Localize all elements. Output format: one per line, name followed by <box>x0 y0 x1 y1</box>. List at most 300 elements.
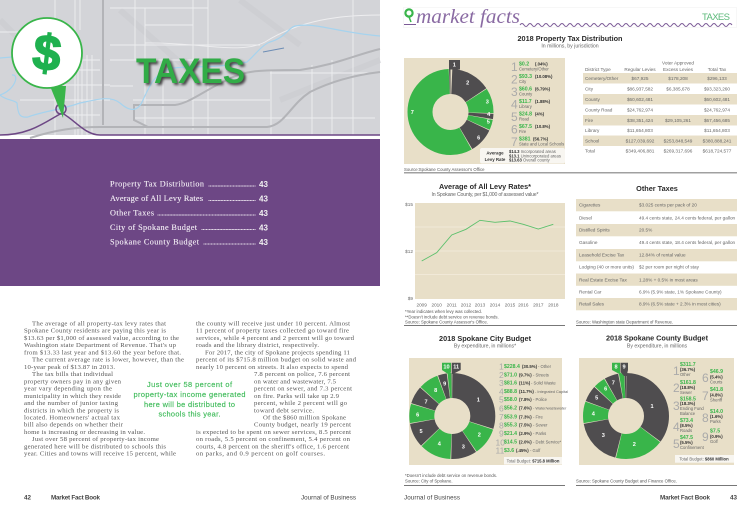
article text column 2: County budget, nearly 19 percent <box>254 422 351 429</box>
panel: city budget donut chart: 3 <box>462 445 465 451</box>
line chart: average levy rates: 2010 <box>431 302 442 308</box>
legend: county budget donut: Roads <box>680 428 692 433</box>
legend: county budget donut: Ending Fund <box>680 406 704 411</box>
article text column 2: roads and the library district, respectively. <box>196 342 319 349</box>
table of contents: Spokane County Budget <box>110 238 200 246</box>
legend: county budget donut: Golf <box>710 439 719 444</box>
table: district type levies: $38,351,424 <box>627 118 653 123</box>
table: district type levies: District Type <box>585 67 611 72</box>
table: district type levies: Total Tax <box>708 67 727 72</box>
legend: county budget donut: 8 <box>702 411 709 425</box>
legend: county budget donut: Sewer <box>680 390 692 395</box>
table of contents: .................................... <box>201 223 256 232</box>
purple route lines <box>0 104 380 135</box>
table of contents: 43 <box>259 194 268 204</box>
legend: city budget donut: 2 <box>499 370 504 380</box>
panel: property tax donut chart <box>404 58 565 164</box>
article text column 2 <box>196 320 357 458</box>
heading: city budget: By expenditure, in millions* <box>454 344 516 350</box>
article text column 2: Of the $860 million Spokane <box>263 414 346 422</box>
panel: purple contents band <box>0 139 380 286</box>
table: other taxes: Retail Sales <box>579 302 605 307</box>
callout: average levy rate: Average <box>486 150 504 156</box>
legend: county budget donut: Sheriff <box>710 398 723 402</box>
panel: city budget donut chart: 1 <box>477 397 480 403</box>
panel: county budget donut chart: 8 <box>614 365 618 371</box>
line chart: average levy rates: 2013 <box>475 302 486 308</box>
panel: property tax donut chart: 1 <box>453 62 456 68</box>
article text column 2: percent of its $715.8 million budget on solid waste and <box>196 357 357 364</box>
legend: county budget donut: (36.7%) <box>680 367 696 372</box>
footer right page: 43 <box>730 494 738 502</box>
panel: city budget donut chart: 5 <box>419 429 423 435</box>
legend: county budget donut: $41.8 <box>710 387 723 393</box>
table: district type levies: $93,323,260 <box>704 87 730 92</box>
panel: property tax donut chart: 4 <box>487 112 491 118</box>
legend: county budget donut: (8.5%) <box>680 423 693 428</box>
legend: city budget donut: 7 <box>499 412 504 422</box>
line chart: average levy rates: 2009 <box>416 302 427 308</box>
article text column 1: Spokane County residents are paying this year is <box>24 328 166 335</box>
legend: property tax donut: 7 <box>511 135 518 149</box>
legend: property tax donut: $381 <box>519 136 531 142</box>
legend: city budget donut: - Parks <box>533 431 546 436</box>
article text column 1: Just over 58 percent of property-tax income <box>32 436 159 443</box>
legend: county budget donut: 7 <box>702 389 709 403</box>
legend: property tax donut <box>511 60 564 149</box>
table: district type levies: $127,039,692 <box>626 138 655 143</box>
table: other taxes: 8.9% (6.5% state + 2.3% in most cities) <box>639 302 721 307</box>
table: district type levies: $269,317,696 <box>664 149 693 154</box>
article text column 1: municipality in which they reside <box>24 393 121 400</box>
legend: property tax donut: Fire <box>519 129 527 134</box>
line chart: average levy rates: 2018 <box>548 302 559 308</box>
legend: county budget donut: Confinement <box>680 445 705 450</box>
heading: county budget: 2018 Spokane County Budget <box>606 334 709 342</box>
legend: city budget donut: $21.4 <box>504 431 517 437</box>
legend: property tax donut: (6.79%) <box>535 86 551 92</box>
legend: property tax donut: $0.2 <box>519 62 529 68</box>
source: city budget <box>404 473 565 486</box>
header: market facts logo <box>404 6 736 28</box>
chart footnotes: Source: Spokane County Assessor's Office. <box>405 320 488 324</box>
footer left page: Journal of Business <box>301 494 356 502</box>
legend: property tax donut: 4 <box>511 98 518 112</box>
legend: property tax donut: $93.3 <box>519 74 532 80</box>
table of contents <box>110 180 268 247</box>
heading: property tax distribution: In millions, by jurisdiction <box>541 44 599 50</box>
legend: city budget donut: 11 <box>496 446 505 456</box>
legend: city budget donut: (7.8%) <box>519 397 532 402</box>
legend: city budget donut: 5 <box>499 395 504 405</box>
source: city budget: Source: City of Spokane. <box>405 478 453 484</box>
panel: county budget donut chart: 9 <box>622 365 626 371</box>
legend: county budget donut: $311.7 <box>680 362 696 368</box>
source: county budget: Source: Spokane County Budget and Finance Office. <box>576 478 677 484</box>
panel: city budget donut chart: 6 <box>416 413 419 419</box>
table: other taxes: $3.025 cents per pack of 20 <box>639 203 697 208</box>
line chart: average levy rates: 2015 <box>505 302 516 308</box>
legend: city budget donut: $88.8 <box>504 389 517 395</box>
panel: property tax donut chart: 7 <box>411 110 414 116</box>
legend: city budget donut: 8 <box>499 420 504 430</box>
panel: city budget donut chart: 8 <box>434 388 437 394</box>
source: other taxes: Source: Washington state Department of Revenue. <box>576 320 673 324</box>
legend: city budget donut: 4 <box>499 386 504 396</box>
table: other taxes: Rental Car <box>579 289 602 294</box>
panel: property tax donut chart: 2 <box>466 81 469 87</box>
article text column 2: courts, 4.8 percent on the sheriff's office, 1.6 percent <box>196 443 349 450</box>
legend: city budget donut: $71.0 <box>504 372 517 378</box>
callout: average levy rate: $14.3 Incorporated areas <box>509 149 556 154</box>
pull quote: here will be distributed to <box>144 400 235 409</box>
legend: city budget donut: 6 <box>499 403 504 413</box>
legend: city budget donut: - Integrated Capital <box>535 389 568 394</box>
table: district type levies: $24,762,974 <box>627 108 653 113</box>
legend: city budget donut: (11.7%) <box>519 389 534 394</box>
legend: city budget donut: - Police <box>533 397 548 402</box>
legend: property tax donut: 5 <box>511 110 518 124</box>
table: district type levies: City <box>585 87 594 92</box>
legend: city budget donut: (30.5%) <box>522 364 538 369</box>
table of contents: 43 <box>259 238 268 247</box>
table: other taxes: Lodging (40 or more units) <box>579 265 634 270</box>
table: other taxes: 1.28% + 0.5% in most areas <box>639 277 698 282</box>
article text column 1: generated here will be distributed to schools this <box>24 443 166 450</box>
legend: county budget donut: Other <box>680 372 691 377</box>
legend: city budget donut: (7.5%) <box>519 423 532 428</box>
total budget: county <box>675 455 734 463</box>
icon: green dollar map pin: $ <box>30 24 64 83</box>
legend: county budget donut: $46.9 <box>710 369 723 375</box>
table: other taxes: $2 per room per night of stay <box>639 265 700 270</box>
table: district type levies: Cemetery/Other <box>585 76 619 81</box>
legend: county budget donut: $47.5 <box>680 435 693 441</box>
article text column 2: 11 percent of property taxes collected go toward fire <box>196 328 349 335</box>
legend: city budget donut: $55.3 <box>504 423 517 429</box>
panel: property tax donut chart: 3 <box>486 100 489 106</box>
article text column 2: on roads, 5.5 percent on confinement, 5.4 percent on <box>196 436 351 443</box>
legend: county budget donut: (5.5%) <box>680 440 693 445</box>
legend: county budget donut: $14.0 <box>710 409 723 415</box>
legend: property tax donut: $11.7 <box>519 99 532 105</box>
legend: county budget donut: $7.5 <box>710 428 720 434</box>
legend: city budget donut: $228.4 <box>504 364 520 370</box>
article text column 1: The tax bills that individual <box>32 371 113 378</box>
callout: average levy rate: $13.1 Unincorporated areas <box>509 153 561 158</box>
legend: county budget donut: 4 <box>673 420 680 434</box>
panel: county budget donut chart <box>579 358 734 465</box>
legend: city budget donut: - Fire <box>533 414 543 419</box>
heading: average of all levy rates: Average of All Levy Rates* <box>439 182 531 191</box>
legend: city budget donut: $81.6 <box>504 380 517 386</box>
legend: property tax donut: 6 <box>511 122 518 136</box>
legend: county budget donut: $158.5 <box>680 396 696 402</box>
table: district type levies: $86,937,582 <box>627 87 653 92</box>
legend: property tax donut: 3 <box>511 85 518 99</box>
table: district type levies: $618,724,577 <box>703 149 732 154</box>
total budget: city: Total Budget: $715.8 Million <box>507 458 560 464</box>
legend: county budget donut: (0.9%) <box>710 434 723 439</box>
legend: city budget donut: (11%) <box>519 380 531 385</box>
source: city budget: *Doesn't include debt service on revenue bonds. <box>405 473 497 478</box>
article text column 2: services, while 4 percent and 2 percent will go toward <box>196 335 355 342</box>
table of contents: ............................... <box>208 194 256 203</box>
table: other taxes: Distilled Spirits <box>579 228 610 233</box>
heading: county budget: By expenditure, in millions <box>627 344 688 350</box>
legend: property tax donut: (56.7%) <box>533 136 549 142</box>
pull quote: property-tax income generated <box>134 390 246 399</box>
total budget: city <box>504 457 562 464</box>
legend: property tax donut: $60.6 <box>519 86 532 92</box>
heading: average of all levy rates: In Spokane County, per $1,000 of assessed value* <box>432 192 538 198</box>
header: TAXES tag: TAXES <box>702 12 730 23</box>
footer right page: Journal of Business <box>404 494 460 502</box>
article text column 1: Washington state Department of Revenue. That's up <box>24 342 177 349</box>
legend: city budget donut: $3.6 <box>504 448 514 454</box>
legend: property tax donut: (.04%) <box>535 62 548 66</box>
table: district type levies: $380,888,241 <box>703 138 732 143</box>
legend: county budget donut: (18.8%) <box>680 385 696 390</box>
legend: county budget donut: 1 <box>673 364 680 378</box>
callout: average levy rate: Levy Rate <box>485 157 506 162</box>
article text column 2: 7.8 percent on police, 7.6 percent <box>254 371 350 378</box>
article text column 1: 10-year peak of $13.87 in 2013. <box>24 364 115 371</box>
callout: average levy rate <box>480 148 565 164</box>
article text column 1: and the number of junior taxing <box>24 400 119 407</box>
legend: city budget donut: - Other <box>538 364 552 369</box>
panel: county budget donut chart: 1 <box>650 404 654 410</box>
table: district type levies: $253,848,549 <box>664 138 693 143</box>
legend: city budget donut: 3 <box>499 378 504 388</box>
heading: other taxes: Other Taxes <box>636 184 678 193</box>
table: other taxes: Leasehold Excise Tax <box>579 253 625 258</box>
header: market facts logo: market facts <box>416 6 520 28</box>
chart footnotes: **Doesn't include debt service on revenue bonds. <box>405 314 499 319</box>
article text column 1: located. Homeowners' actual tax <box>24 414 121 422</box>
chart footnotes <box>404 309 565 326</box>
legend: property tax donut: Road <box>519 116 530 122</box>
table of contents: Property Tax Distribution <box>110 180 204 188</box>
legend: county budget donut: (1.6%) <box>710 414 723 419</box>
legend: county budget donut: 9 <box>702 430 709 444</box>
heading: county budget <box>606 334 709 350</box>
table: district type levies: $24,762,974 <box>704 108 730 113</box>
panel: city budget donut chart <box>409 358 562 465</box>
table: district type levies <box>583 60 737 154</box>
legend: property tax donut: State and Local Schools <box>519 141 564 146</box>
chart footnotes: *Year indicates when levy was collected. <box>405 309 482 314</box>
legend: city budget donut: 1 <box>499 362 504 372</box>
legend: city budget donut: (7.3%) <box>519 414 532 419</box>
table: district type levies: Excess Levies <box>663 67 694 72</box>
article text column 1: bill also depends on whether their <box>24 422 124 429</box>
legend: property tax donut: City <box>519 79 527 84</box>
heading: average of all levy rates <box>432 182 538 198</box>
table of contents: Other Taxes <box>110 208 154 217</box>
heading: city budget: 2018 Spokane City Budget <box>439 334 532 343</box>
table of contents: 43 <box>259 180 268 189</box>
heading: property tax distribution <box>518 34 622 50</box>
legend: property tax donut: $67.5 <box>519 124 532 130</box>
table: district type levies: $60,602,481 <box>704 97 730 102</box>
legend: property tax donut: Cemetery/Other <box>519 66 549 71</box>
panel: county budget donut chart: 6 <box>604 386 607 392</box>
article text column 2: the county will receive just under 10 percent. Almost <box>196 320 350 328</box>
table: district type levies: $296,133 <box>707 76 727 81</box>
icon: green dollar map pin <box>12 18 82 118</box>
article text column 2: percent on sewer, and 7.3 percent <box>254 386 352 393</box>
legend: city budget donut: - Water/wastewater <box>533 406 567 411</box>
panel: city budget donut chart: 2 <box>478 432 481 438</box>
table: district type levies: Regular Levies <box>624 67 656 72</box>
pull quote: Just over 58 percent of <box>147 380 233 389</box>
article text column 1: year vary depending upon the <box>24 386 112 393</box>
legend: city budget donut: (2.0%) <box>519 440 532 445</box>
legend: county budget donut: 5 <box>673 437 680 451</box>
legend: county budget donut: 6 <box>702 371 709 385</box>
legend: county budget donut: (4.8%) <box>710 392 723 398</box>
table: other taxes: 20.5% <box>639 228 652 233</box>
footer left page: Market Fact Book <box>51 494 100 502</box>
article text column 1: The average of all property-tax levy rates that <box>32 320 166 328</box>
article text column 1: year. Cities and towns will receive 15 percent, while <box>24 451 176 458</box>
table: other taxes: Gasoline <box>579 240 598 245</box>
table: district type levies: Voter Approved <box>662 60 694 66</box>
table: district type levies: $349,406,881 <box>626 149 655 154</box>
footer left page: 42 <box>24 494 32 502</box>
pull quote: schools this year. <box>158 410 220 419</box>
article text column 1: $13.63 per $1,000 of assessed value, according to the <box>24 335 179 342</box>
legend: county budget donut: Parks <box>710 419 721 424</box>
panel: city budget donut chart: 10 <box>443 365 450 371</box>
table: district type levies: $11,654,803 <box>704 128 730 133</box>
line chart: average levy rates: 2012 <box>461 302 472 308</box>
table: district type levies: $29,105,261 <box>665 118 691 123</box>
table: district type levies: $67,925 <box>632 76 649 81</box>
legend: city budget donut: 9 <box>499 429 504 439</box>
article text column 2: is expected to be spent on sewer services, 8.5 percent <box>196 429 351 436</box>
heading: city budget <box>439 334 532 350</box>
panel: county budget donut chart: 7 <box>612 380 615 386</box>
table of contents: City of Spokane Budget <box>110 223 198 232</box>
legend: city budget donut: (7.6%) <box>519 406 532 411</box>
panel: city budget donut chart: 9 <box>443 381 446 387</box>
panel: city budget donut chart: 7 <box>424 400 428 406</box>
legend: property tax donut: (4%) <box>535 112 545 116</box>
legend: city budget donut: (2.9%) <box>519 431 532 436</box>
legend: county budget donut: $73.4 <box>680 418 693 424</box>
footer right page: Market Fact Book <box>660 494 710 502</box>
legend: property tax donut: (10.8%) <box>535 124 551 129</box>
article text column 2: toward debt service. <box>254 407 314 414</box>
table: district type levies: Fire <box>585 118 593 123</box>
legend: city budget donut: 10 <box>496 437 505 447</box>
table: other taxes <box>576 199 737 310</box>
table: district type levies: School <box>585 138 599 143</box>
legend: city budget donut <box>496 362 568 456</box>
article text column 1: districts in which the property is <box>24 407 119 414</box>
legend: city budget donut: $14.5 <box>504 440 517 446</box>
legend: property tax donut: Library <box>519 104 533 109</box>
table: district type levies: County Road <box>585 108 613 113</box>
legend: county budget donut <box>673 362 723 451</box>
article text column 2: on water and wastewater, 7.5 <box>254 378 337 385</box>
article text column 2: on parks, and 0.9 percent on golf courses. <box>196 451 325 458</box>
article text column 2: percent, while 2 percent will go <box>254 400 348 407</box>
heading: property tax distribution: 2018 Property Tax Distribution <box>518 34 622 43</box>
legend: city budget donut: - Debt Service* <box>533 440 562 445</box>
line chart: average levy rates <box>405 202 565 308</box>
legend: city budget donut: $58.0 <box>504 397 517 403</box>
legend: property tax donut: 1 <box>511 60 518 74</box>
article text column 1 <box>24 320 184 458</box>
callout: average levy rate: $13.63 Overall county <box>509 158 551 163</box>
article text column 1: The current average rate is lower, however, than the <box>32 357 184 364</box>
pull quote <box>134 380 246 419</box>
table: other taxes: Diesel <box>579 215 592 220</box>
table: district type levies: Library <box>585 128 600 133</box>
legend: county budget donut: 3 <box>673 399 680 413</box>
panel: county budget donut chart: 2 <box>633 442 636 448</box>
panel: city budget donut chart: 4 <box>438 441 442 447</box>
legend: city budget donut: (9.7%) <box>519 372 532 377</box>
article text column 2: nearly 10 percent on streets. It also expects to spend <box>196 364 349 371</box>
legend: county budget donut: Courts <box>710 380 722 384</box>
table: other taxes: Cigarettes <box>579 203 601 208</box>
table: district type levies: Total <box>585 149 595 154</box>
total budget: county: Total Budget: $860 Million <box>679 456 729 462</box>
legend: city budget donut: (.45%) <box>516 448 529 453</box>
article text column 2: on fire. Parks will take up 2.9 <box>254 393 340 400</box>
source: property tax: Source:Spokane County Assessor's Office <box>404 167 485 172</box>
line chart: average levy rates: 2017 <box>533 302 544 308</box>
legend: county budget donut: (5.4%) <box>710 374 723 380</box>
legend: city budget donut: - Solid Waste <box>531 380 556 385</box>
panel: county budget donut chart: 5 <box>595 396 598 402</box>
panel: property tax donut chart: 5 <box>487 120 490 126</box>
panel: property tax donut chart: 6 <box>477 135 480 141</box>
legend: city budget donut: - Golf <box>530 448 541 453</box>
table: district type levies: County <box>585 97 601 102</box>
table: district type levies: $11,654,803 <box>627 128 653 133</box>
legend: county budget donut: (18.3%) <box>680 401 696 406</box>
panel: county budget donut chart: 4 <box>592 411 596 417</box>
legend: city budget donut: - Sewer <box>533 423 548 428</box>
legend: county budget donut: 2 <box>673 381 680 395</box>
legend: property tax donut: (1.88%) <box>535 99 551 104</box>
legend: property tax donut: 2 <box>511 72 518 86</box>
line chart: average levy rates: $9 <box>408 296 413 301</box>
table of contents: ................................... <box>203 238 256 246</box>
footer right page <box>404 494 738 502</box>
line chart: average levy rates: 2011 <box>447 302 457 308</box>
table of contents: 43 <box>259 209 268 218</box>
table: district type levies: $60,602,481 <box>627 97 653 102</box>
table: other taxes: 12.84% of rental value <box>639 253 686 258</box>
legend: city budget donut: $56.2 <box>504 406 517 412</box>
article text column 2: For 2017, the city of Spokane projects spending 11 <box>205 349 350 356</box>
table of contents: ................................................................. <box>157 208 256 217</box>
footer left page <box>24 494 356 502</box>
legend: city budget donut: - Streets <box>533 372 549 377</box>
table of contents: ............................... <box>208 180 256 188</box>
table of contents: Average of All Levy Rates <box>110 194 203 203</box>
table: district type levies: $178,208 <box>668 76 688 81</box>
line chart: average levy rates: 2016 <box>518 302 529 308</box>
legend: county budget donut: Balance <box>680 411 696 416</box>
legend: county budget donut: $161.8 <box>680 380 696 386</box>
